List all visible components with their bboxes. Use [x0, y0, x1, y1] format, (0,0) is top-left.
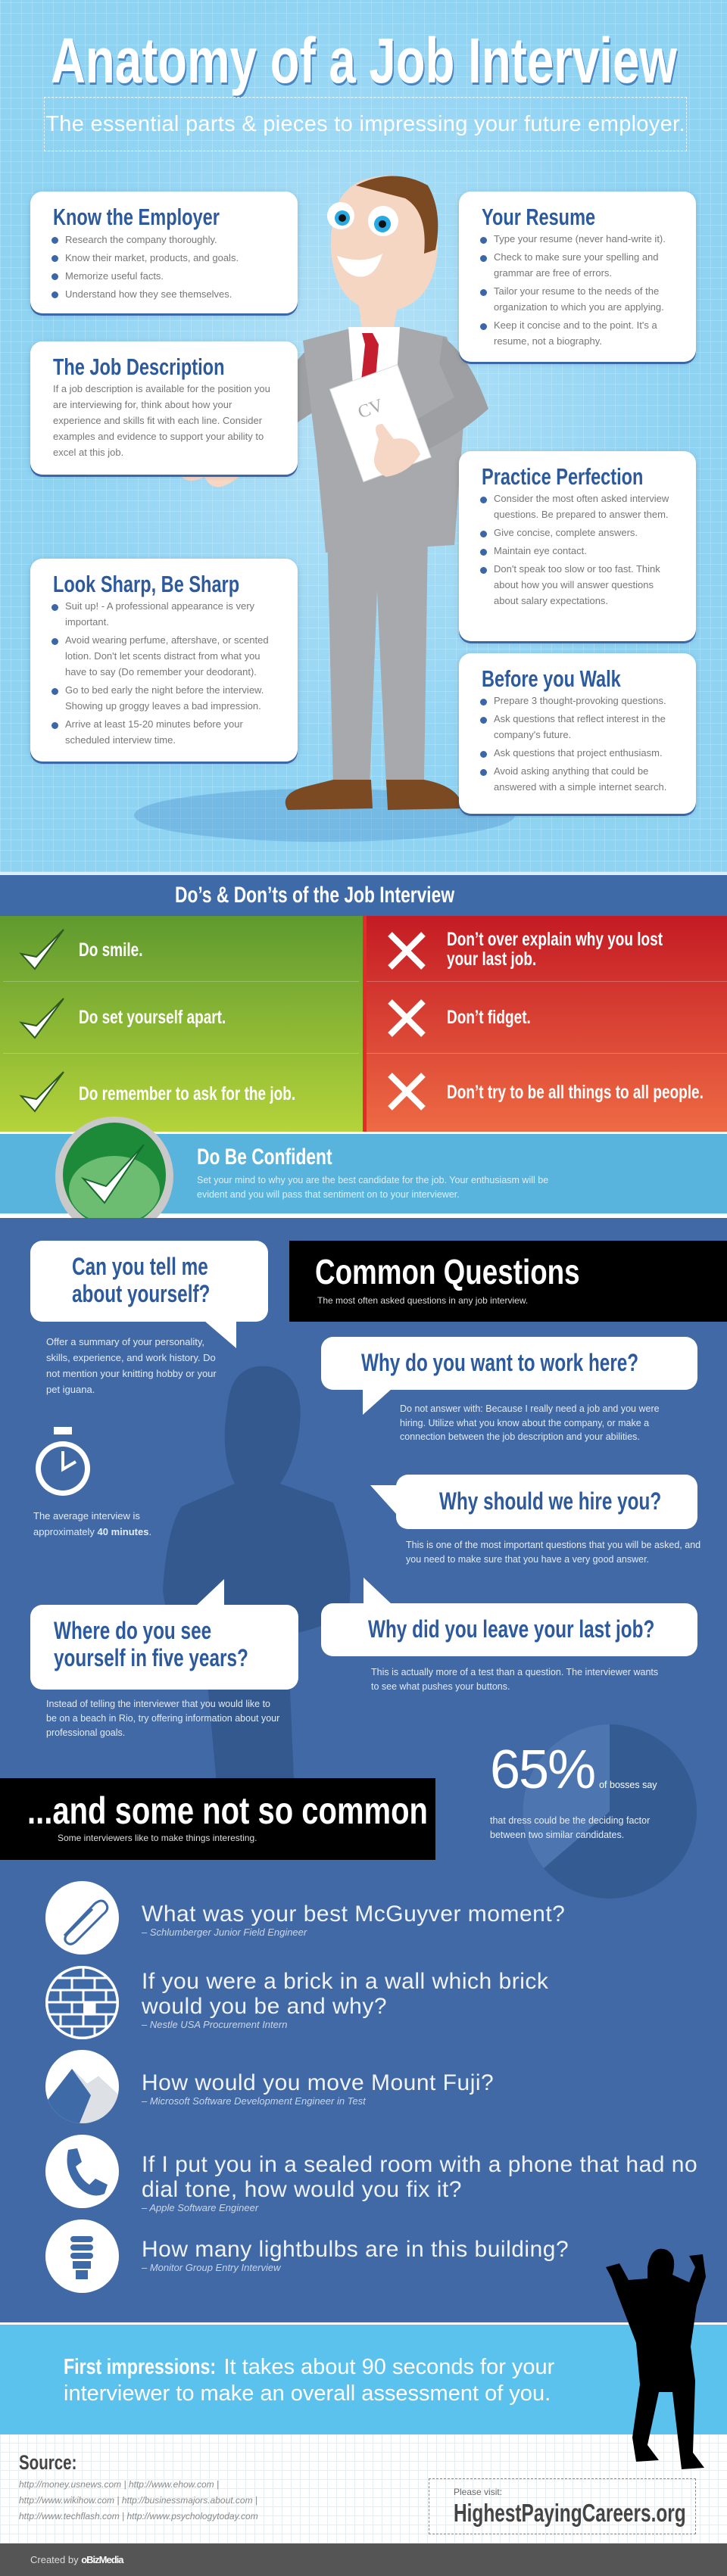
dont: all things — [388, 1073, 704, 1110]
question: lightbulbs: – Monitor Group Entry Interview — [142, 2262, 281, 2273]
text: confident: Set your mind to why you are the best candidate for the job. Your enthusiasm will be evident and you will pass that sentiment on to your interviewer. — [197, 1175, 548, 1200]
header: not so common: ...and some not so common — [27, 1789, 428, 1832]
bubble: tell me about yourself — [30, 1241, 268, 1322]
do: ask for job: Do remember to ask for the job. — [79, 1083, 295, 1104]
please visit box — [429, 2478, 696, 2534]
panel: know the employer: Know their market, products, and goals. — [65, 252, 239, 263]
do: set apart — [3, 982, 359, 1054]
panel: practice perfection: Maintain eye contact. — [494, 545, 587, 556]
question: phone: – Apple Software Engineer — [142, 2202, 258, 2213]
subtitle: The essential parts & pieces to impressing your future employer. — [45, 112, 685, 136]
source urls — [19, 2479, 258, 2521]
panel: look sharp: Avoid wearing perfume, aftershave, or scented lotion. Don't let scents distract from what you have to say (Do remember your deodorant). — [65, 634, 269, 677]
question: mount fuji — [141, 2070, 494, 2107]
question: lightbulbs — [141, 2237, 569, 2273]
please visit box: Please visit: — [454, 2487, 502, 2497]
title: Anatomy of a Job Interview — [51, 25, 677, 96]
heading: do be confident: Do Be Confident — [197, 1145, 332, 1170]
dont: fidget — [367, 982, 727, 1054]
top section background — [0, 0, 727, 872]
first impressions band: It takes about 90 seconds for your interviewer to make an overall assessment of you. — [64, 2355, 554, 2406]
question: mount fuji: – Microsoft Software Development Engineer in Test — [142, 2095, 366, 2107]
question: mcguyver: What was your best McGuyver moment? — [142, 1902, 565, 1927]
source urls: http://www.techflash.com | http://www.psychologytoday.com — [19, 2511, 258, 2521]
panel: before you walk: Ask questions that reflect interest in the company's future. — [494, 713, 666, 740]
dont: over explain — [367, 916, 727, 982]
header: not so common: Some interviewers like to make things interesting. — [58, 1833, 257, 1843]
question: lightbulbs: How many lightbulbs are in this building? — [142, 2237, 569, 2262]
text: why work here: Do not answer with: Because I really need a job and you were hiring. Utilize what you know about the company, or make a connection between the job description and your abilities. — [400, 1403, 660, 1442]
do: set apart: Do set yourself apart. — [79, 1007, 226, 1028]
bubble: why work here — [321, 1337, 697, 1390]
dont: over explain: Don’t over explain why you lost — [447, 929, 663, 950]
question: brick — [141, 1969, 548, 2030]
panel: before you walk: Avoid asking anything that could be answered with a simple internet search. — [494, 765, 666, 793]
panel: look sharp: Suit up! - A professional appearance is very important. — [65, 600, 254, 628]
question: phone — [141, 2152, 697, 2213]
dos and donts header: Do’s & Don’ts of the Job Interview — [175, 883, 454, 908]
heading: practice perfection: Practice Perfection — [482, 463, 643, 490]
do: smile — [3, 916, 359, 982]
text: why hire you: This is one of the most important questions that you will be asked, and you need to make sure that you have a very good answer. — [406, 1540, 700, 1564]
bubble: leave last job: Why did you leave your last job? — [368, 1615, 654, 1643]
panel: dos — [0, 916, 363, 1132]
panel: your resume: Keep it concise and to the point. It's a resume, not a biography. — [494, 319, 657, 347]
chart: 65% pie — [523, 1724, 697, 1899]
text: average interview: The average interview is approximately 40 minutes. — [33, 1510, 151, 1537]
panel: practice perfection — [459, 451, 696, 641]
panel: look sharp — [30, 559, 298, 762]
figure: businessman: CV — [355, 395, 386, 422]
icon: stopwatch — [36, 1427, 90, 1496]
bubble: leave last job — [321, 1603, 697, 1656]
do: smile: Do smile. — [79, 939, 142, 961]
panel: know the employer: Memorize useful facts. — [65, 270, 164, 282]
dont: over explain: your last job. — [447, 948, 536, 970]
source heading: Source: — [19, 2451, 76, 2474]
text: tell me about yourself: Offer a summary of your personality, skills, experience, and work history. Do not mention your knitting hobby or your pet iguana. — [46, 1336, 217, 1395]
stat: 65 percent — [490, 1740, 657, 1840]
panel: look sharp: Arrive at least 15-20 minutes before your scheduled interview time. — [65, 718, 243, 746]
panel: your resume: Tailor your resume to the needs of the organization to which you are applying. — [494, 285, 664, 313]
bubble: five years: yourself in five years? — [54, 1644, 248, 1671]
text: leave last job: This is actually more of a test than a question. The interviewer wants to see what pushes your buttons. — [371, 1667, 658, 1692]
common questions header: The most often asked questions in any job interview. — [317, 1295, 528, 1306]
question: brick: would you be and why? — [142, 1994, 387, 2019]
panel: your resume — [459, 192, 696, 362]
source urls: http://www.wikihow.com | http://businessmajors.about.com | — [19, 2495, 257, 2506]
silhouette: celebrating man — [606, 2248, 706, 2469]
footer — [0, 2434, 727, 2543]
bubble: why hire you: Why should we hire you? — [439, 1487, 661, 1515]
question: mcguyver — [141, 1902, 565, 1938]
panel: know the employer: Understand how they see themselves. — [65, 288, 232, 300]
panel: your resume: Check to make sure your spelling and grammar are free of errors. — [494, 251, 659, 279]
bubble: why hire you — [396, 1475, 697, 1529]
bubble: five years: Where do you see — [54, 1617, 211, 1644]
icon: phone — [45, 2135, 119, 2208]
panel: before you walk — [459, 653, 696, 814]
silhouette man — [163, 1366, 350, 1778]
first impressions band — [0, 2322, 727, 2434]
question: mcguyver: – Schlumberger Junior Field Engineer — [142, 1927, 307, 1938]
panel: look sharp: Go to bed early the night before the interview. Showing up groggy leaves a bad impression. — [65, 684, 264, 712]
source urls: http://money.usnews.com | http://www.ehow.com | — [19, 2479, 219, 2490]
panel: know the employer: Research the company thoroughly. — [65, 234, 217, 245]
question: brick: If you were a brick in a wall which brick — [142, 1969, 548, 1994]
heading: job description: The Job Description — [53, 354, 224, 380]
bubble: why work here: Why do you want to work here? — [361, 1349, 638, 1376]
icon: paperclip — [45, 1881, 119, 1955]
panel: donts — [363, 916, 727, 1132]
question: brick: – Nestle USA Procurement Intern — [142, 2019, 287, 2030]
stat: 65 percent: 65% of bosses say — [490, 1740, 657, 1800]
bubble: tell me about yourself: Can you tell me — [72, 1253, 208, 1280]
credit bar — [0, 2543, 727, 2576]
icon: mountain — [45, 2050, 119, 2123]
panel: practice perfection: Consider the most often asked interview questions. Be prepared to answer them. — [494, 493, 669, 520]
panel: do be confident — [0, 1132, 727, 1216]
first impressions band: First impressions: — [64, 2355, 216, 2379]
icon: lightbulb — [45, 2219, 119, 2293]
panel: before you walk: Prepare 3 thought-provoking questions. — [494, 695, 666, 706]
question: mount fuji: How would you move Mount Fuji? — [142, 2070, 494, 2095]
heading: look sharp: Look Sharp, Be Sharp — [53, 571, 239, 597]
bubble: five years — [30, 1605, 298, 1690]
panel: know the employer — [30, 192, 298, 313]
text: five years: Instead of telling the interviewer that you would like to be on a beach in Rio, try offering information about your professional goals. — [46, 1699, 279, 1738]
figure: businessman — [182, 176, 488, 810]
heading: before you walk: Before you Walk — [482, 665, 621, 692]
question: phone: If I put you in a sealed room with a phone that had no — [142, 2152, 697, 2177]
icon: big check button — [55, 1117, 173, 1218]
common questions header — [289, 1241, 727, 1322]
common questions header: Common Questions — [315, 1252, 580, 1291]
panel: practice perfection: Don't speak too slow or too fast. Think about how you will answer questions about salary expectations. — [494, 563, 660, 606]
bubble: tell me about yourself: about yourself? — [72, 1280, 210, 1307]
heading: know the employer: Know the Employer — [53, 204, 220, 230]
dont: all things: Don’t try to be all things to all people. — [447, 1082, 704, 1103]
please visit box: HighestPayingCareers.org — [454, 2499, 686, 2527]
question: phone: dial tone, how would you fix it? — [142, 2177, 462, 2202]
icon: brick wall — [45, 1966, 119, 2039]
panel: before you walk: Ask questions that project enthusiasm. — [494, 747, 663, 758]
shadow under man — [134, 789, 515, 842]
panel: your resume: Type your resume (never hand-write it). — [494, 233, 666, 245]
questions section background — [0, 1218, 727, 2324]
credit bar: Created by oBizMedia — [30, 2554, 123, 2565]
panel: job description: If a job description is available for the position you are interviewing for, think about how your experience and skills fit with each line. Consider examples and evidence to support your ability to excel at this job. — [53, 383, 270, 458]
header: not so common — [0, 1778, 435, 1860]
heading: your resume: Your Resume — [482, 204, 595, 230]
do: ask for job — [19, 1071, 295, 1113]
subtitle — [44, 97, 687, 151]
stat: 65 percent: that dress could be the deciding factor between two similar candidates. — [490, 1815, 650, 1840]
panel: practice perfection: Give concise, complete answers. — [494, 527, 638, 538]
dos and donts header — [0, 872, 727, 916]
dont: fidget: Don’t fidget. — [447, 1007, 531, 1028]
panel: job description — [30, 341, 298, 475]
